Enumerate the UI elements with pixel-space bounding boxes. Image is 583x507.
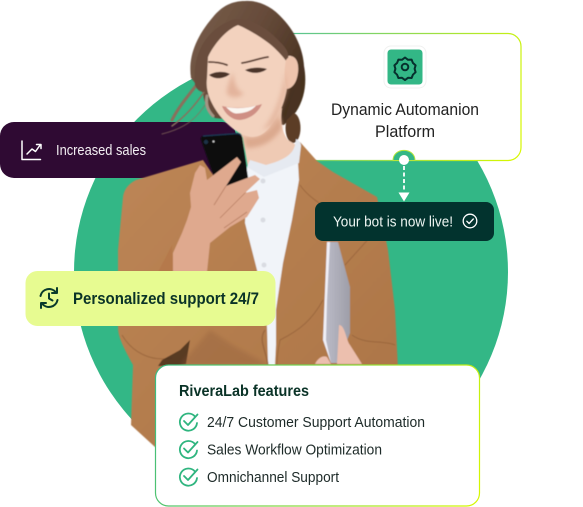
icon: check circle xyxy=(463,214,477,228)
shirt collar xyxy=(247,139,301,177)
eyes xyxy=(209,68,267,78)
coat xyxy=(118,142,402,447)
hair back xyxy=(190,1,305,125)
mouth xyxy=(222,104,262,120)
neck xyxy=(237,108,300,176)
card: RiveraLab features xyxy=(156,365,480,506)
card title xyxy=(331,101,479,141)
nose shading xyxy=(227,72,244,97)
coat shading xyxy=(180,330,268,365)
coat folds xyxy=(122,185,395,365)
hair dark side xyxy=(284,50,301,122)
icon: gear tile xyxy=(384,46,426,88)
pill: Increased sales xyxy=(0,122,236,178)
phone camera xyxy=(204,140,214,144)
woman photo illustration xyxy=(118,1,402,447)
cheek shading xyxy=(262,70,287,130)
card: Dynamic Automanion Platform xyxy=(270,34,521,160)
hand holding phone xyxy=(173,157,260,272)
coat sleeve cuff xyxy=(158,245,173,272)
feature: sales workflow: Sales Workflow Optimization xyxy=(207,442,382,458)
bun xyxy=(286,113,300,143)
hair loose strands xyxy=(162,80,213,134)
neck shadow xyxy=(243,116,282,148)
ear xyxy=(285,57,298,89)
shirt buttons xyxy=(260,178,266,268)
pill: Your bot is now live xyxy=(315,202,494,241)
pill label: Personalized support 24/7 xyxy=(73,290,259,308)
eyebrows xyxy=(209,57,268,65)
phone xyxy=(201,134,250,208)
card title: Dynamic Automanion xyxy=(331,101,479,119)
pill: Personalized support 24/7 xyxy=(26,271,276,326)
feature: customer support: 24/7 Customer Support Automation xyxy=(207,415,425,431)
connector: card to bot status xyxy=(393,150,415,202)
green background circle xyxy=(74,55,508,489)
card heading: RiveraLab features xyxy=(179,383,309,400)
phone rim xyxy=(203,134,242,136)
feature: omnichannel: Omnichannel Support xyxy=(207,470,339,486)
teeth xyxy=(226,106,256,114)
card title: Platform xyxy=(375,123,435,141)
pill label: Your bot is now live! xyxy=(333,214,453,230)
finger lines xyxy=(214,186,247,228)
coat shadow xyxy=(158,340,190,366)
shirt xyxy=(245,162,299,365)
face xyxy=(207,25,298,137)
tablet xyxy=(323,242,350,363)
pill label: Increased sales xyxy=(56,143,146,159)
icon: history clock xyxy=(40,288,58,308)
tablet edge xyxy=(323,242,331,363)
icon: line chart xyxy=(22,141,41,160)
hair fringe xyxy=(195,19,288,92)
hand on tablet xyxy=(315,325,362,364)
